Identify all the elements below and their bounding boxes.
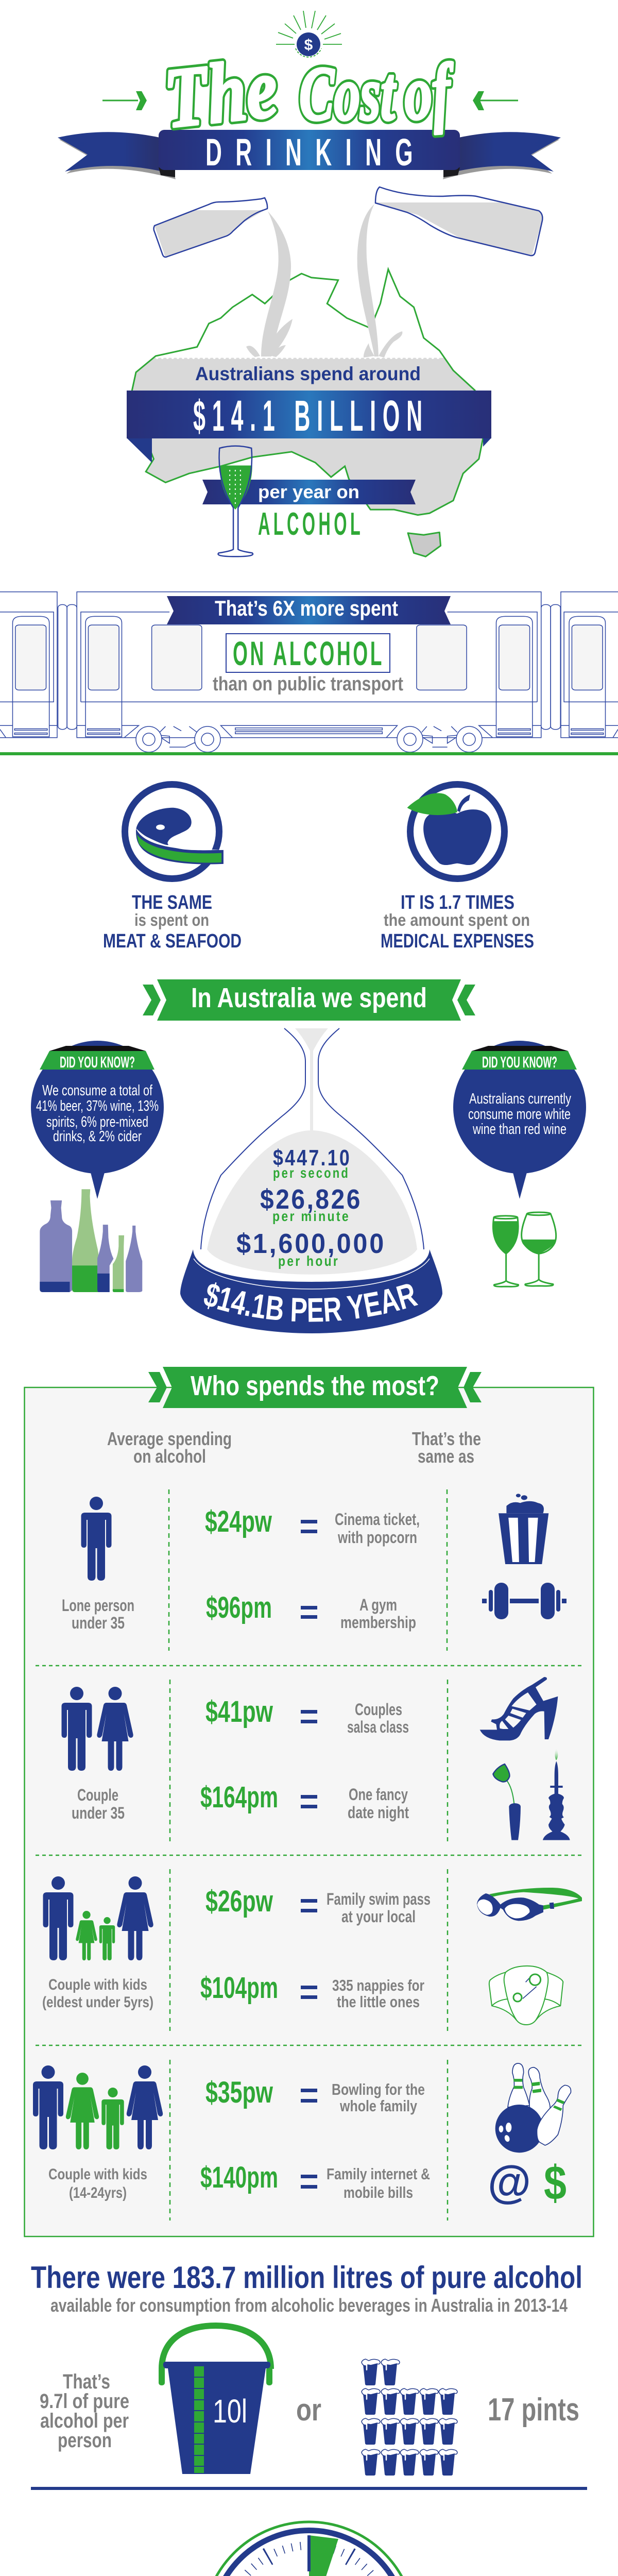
column heading: average spending: Average spending: [107, 1428, 232, 1449]
icon: vase and candle: [493, 1748, 570, 1840]
stat: per minute: $26,826: [260, 1184, 362, 1215]
heading: in australia we spend: [143, 979, 475, 1021]
icon: 10 litre bucket: [159, 2326, 272, 2474]
text: salsa class: [347, 1700, 409, 1736]
text: 9.7l per person: That’s: [63, 2370, 110, 2393]
amount: 24pw: $24pw: [205, 1505, 272, 1538]
amount: 104pm: $104pm: [200, 1971, 278, 2005]
amount: 41pw: $41pw: [205, 1695, 273, 1728]
stat: per hour: per hour: [278, 1253, 339, 1269]
hourglass base: [180, 1249, 442, 1333]
text: salsa class: Couples: [355, 1700, 402, 1719]
label: lone person: [62, 1596, 134, 1632]
label: eldest under 5yrs: (eldest under 5yrs): [42, 1994, 153, 2011]
callout: did you know white wine: wine than red wine: [472, 1121, 566, 1138]
text: cinema ticket: with popcorn: [337, 1528, 417, 1547]
label: lone person: Lone person: [62, 1596, 134, 1615]
wheels: [136, 726, 482, 752]
title: the cost of: of: [401, 47, 458, 137]
icon: 17 pint glasses: [362, 2359, 457, 2476]
callout: did you know beer and wine shares: DID YOU KNOW?: [60, 1053, 135, 1071]
column heading: average spending: on alcohol: [133, 1446, 206, 1467]
amount: 140pm: $140pm: [200, 2161, 278, 2194]
text: date night: One fancy: [349, 1785, 408, 1804]
illustration: train: [0, 592, 618, 755]
callout: did you know beer and wine shares: We consume a total of: [42, 1082, 153, 1099]
callout: did you know white wine: [453, 1041, 586, 1199]
text: internet and mobile: [327, 2165, 430, 2201]
text: internet and mobile: Family internet &: [327, 2165, 430, 2183]
icon: family with young kids: [43, 1876, 153, 1960]
column heading: that's the same as: same as: [418, 1446, 474, 1467]
text: the same: THE SAME: [132, 892, 212, 913]
label: couple: Couple: [77, 1786, 118, 1804]
text: it is 1.7 times: IT IS 1.7 TIMES: [401, 892, 514, 913]
title: the cost of: The: [160, 40, 282, 146]
amount: 164pm: $164pm: [200, 1781, 278, 1814]
box: on alcohol: [226, 634, 390, 672]
panel: who spends the most: [25, 1367, 593, 2236]
heading: drinking: DRINKING: [205, 131, 426, 174]
heading: in australia we spend: In Australia we spend: [191, 982, 427, 1013]
arrow: left: [102, 91, 147, 110]
row: couple under 35: [62, 1677, 570, 1840]
hourglass base: $14.1B PER YEAR: [204, 1282, 418, 1322]
icon: 10 litre bucket: 10l: [213, 2393, 247, 2430]
text: meat and seafood: MEAT & SEAFOOD: [103, 930, 242, 952]
stat: per second: [273, 1145, 351, 1181]
text: bowling: Bowling for the: [332, 2080, 425, 2098]
text: gym membership: A gym: [359, 1596, 397, 1614]
hourglass: spending over time: [180, 1028, 442, 1333]
title: the cost of: Cost: [299, 51, 397, 137]
ribbon: 6x more spent: [167, 596, 451, 624]
icon: high heel: [480, 1677, 558, 1740]
text: gym membership: [340, 1596, 416, 1632]
text: cinema ticket: [335, 1510, 420, 1547]
section: pure alcohol volumes: [31, 2260, 587, 2490]
icon: champagne glass: [218, 446, 253, 556]
ribbon: per year on: [202, 480, 416, 504]
title: the cost of: The: [160, 40, 282, 146]
train carriages: [0, 592, 618, 747]
text: alcohol: ALCOHOL: [258, 506, 364, 542]
equals: [301, 1899, 317, 1912]
comparison: meat and seafood: [103, 784, 242, 952]
text: is spent on: is spent on: [134, 910, 209, 929]
label: 14-24yrs: [48, 2166, 147, 2201]
icon: steak: [125, 784, 224, 879]
text: internet and mobile: mobile bills: [344, 2183, 413, 2201]
icon: family with older kids: [33, 2065, 163, 2149]
text: date night: date night: [348, 1803, 409, 1822]
equals: [301, 1710, 317, 1723]
icon: at sign and dollar: [488, 2156, 566, 2210]
callout: did you know white wine: consume more white: [468, 1106, 571, 1123]
icon: apple: [407, 784, 505, 879]
title: the cost of: Cost: [299, 51, 397, 137]
text: swim pass: Family swim pass: [327, 1890, 431, 1908]
ribbon: per year on: per year on: [258, 481, 359, 502]
amount: 35pw: $35pw: [205, 2076, 273, 2109]
stat: per minute: per minute: [272, 1208, 350, 1224]
stat: per second: per second: [273, 1165, 350, 1181]
text: medical expenses: MEDICAL EXPENSES: [381, 930, 534, 952]
icon: bottles: [40, 1189, 142, 1292]
text: swim pass: at your local: [341, 1907, 416, 1926]
bottle: right: [375, 187, 543, 256]
text: cinema ticket: Cinema ticket,: [335, 1510, 420, 1529]
label: couple: under 35: [72, 1804, 125, 1822]
column heading: that's the same as: [412, 1428, 481, 1467]
ribbon: drinking: [58, 130, 561, 179]
text: australians spend around: Australians spend around: [195, 363, 421, 384]
label: 14-24yrs: Couple with kids: [48, 2166, 147, 2183]
text: date night: [348, 1785, 409, 1822]
equals: [301, 2089, 317, 2103]
icon: bowling ball and pins: [495, 2063, 571, 2153]
text: 9.7l per person: 9.7l of pure: [40, 2390, 129, 2413]
box: on alcohol: ON ALCOHOL: [233, 634, 384, 672]
text: salsa class: salsa class: [347, 1718, 409, 1736]
text: 9.7l per person: [40, 2370, 129, 2452]
title: the cost of: of: [401, 47, 458, 137]
illustration: australia with pouring bottles: [127, 187, 543, 556]
icon: popcorn: [499, 1494, 548, 1564]
icon: couple: [62, 1687, 133, 1771]
callout: did you know white wine: Australians currently: [469, 1091, 571, 1107]
callout: did you know white wine: DID YOU KNOW?: [482, 1053, 557, 1071]
equals: [301, 1795, 317, 1808]
rail: [0, 752, 618, 755]
text: or: or: [296, 2393, 321, 2427]
callout: did you know beer and wine shares: 41% beer, 37% wine, 13%: [36, 1098, 159, 1114]
equals: [301, 1606, 317, 1619]
comparison: medical expenses: [381, 784, 534, 952]
text: 17 pints: 17 pints: [488, 2392, 579, 2428]
heading: who spends the most: [148, 1367, 482, 1408]
ribbon: 6x more spent: That’s 6X more spent: [215, 596, 398, 620]
equals: [301, 2175, 317, 2189]
text: than on public transport: than on public transport: [213, 673, 403, 695]
callout: did you know beer and wine shares: drinks, & 2% cider: [53, 1128, 142, 1145]
label: lone person: under 35: [72, 1614, 125, 1632]
icon: dollar coin with rays: $: [304, 37, 313, 54]
text: nappies: the little ones: [337, 1993, 420, 2011]
arrow: right: [473, 91, 518, 110]
stat: per hour: $1,600,000: [236, 1228, 386, 1259]
row: lone person under 35: [62, 1494, 566, 1632]
label: couple: [72, 1786, 125, 1822]
column heading: average spending: [107, 1428, 232, 1467]
banner: 14.1 billion: [127, 363, 491, 463]
amount: 26pw: $26pw: [205, 1885, 273, 1918]
text: swim pass: [327, 1890, 431, 1926]
equals: [301, 1986, 317, 1999]
column heading: that's the same as: That’s the: [412, 1428, 481, 1449]
stat: per second: $447.10: [273, 1145, 351, 1171]
equals: [301, 1520, 317, 1533]
text: nappies: [332, 1976, 424, 2011]
text: bowling: [332, 2080, 425, 2115]
text: bowling: whole family: [339, 2097, 418, 2115]
title: the cost of: [160, 40, 458, 146]
text: 9.7l per person: alcohol per: [40, 2410, 129, 2432]
heading: who spends the most: Who spends the most?: [191, 1370, 439, 1401]
row: couple with older kids: [33, 2063, 571, 2210]
callout: did you know beer and wine shares: spirits, 6% pre-mixed: [46, 1114, 148, 1130]
section: in the 3 mins: [215, 2520, 403, 2576]
text: the amount spent on: the amount spent on: [384, 910, 530, 929]
label: eldest under 5yrs: [42, 1976, 153, 2011]
map: australia: [132, 269, 483, 556]
pour: left stream: [246, 211, 293, 357]
label: eldest under 5yrs: Couple with kids: [48, 1976, 147, 1993]
row: couple with young kids: [42, 1876, 582, 2025]
icon: nappy: [489, 1966, 563, 2025]
bottle: left: [153, 198, 267, 257]
pour: right stream: [357, 204, 402, 358]
icon: dollar coin with rays: [276, 11, 342, 57]
callout: did you know beer and wine shares: [31, 1041, 164, 1199]
text: gym membership: membership: [340, 1613, 416, 1632]
icon: at sign and dollar: @: [488, 2156, 531, 2207]
text: nappies: 335 nappies for: [332, 1976, 424, 1994]
text: 9.7l per person: person: [58, 2429, 112, 2452]
header: the cost of drinking: [58, 11, 561, 179]
icon: clock: [203, 2522, 415, 2576]
label: 14-24yrs: (14-24yrs): [69, 2184, 127, 2201]
icon: goggles: [477, 1888, 582, 1921]
icon: man: [81, 1497, 111, 1581]
icon: dumbbell: [482, 1583, 566, 1619]
icon: at sign and dollar: $: [544, 2156, 566, 2210]
icon: wine glasses: [493, 1212, 556, 1286]
amount: 96pm: $96pm: [206, 1591, 272, 1624]
